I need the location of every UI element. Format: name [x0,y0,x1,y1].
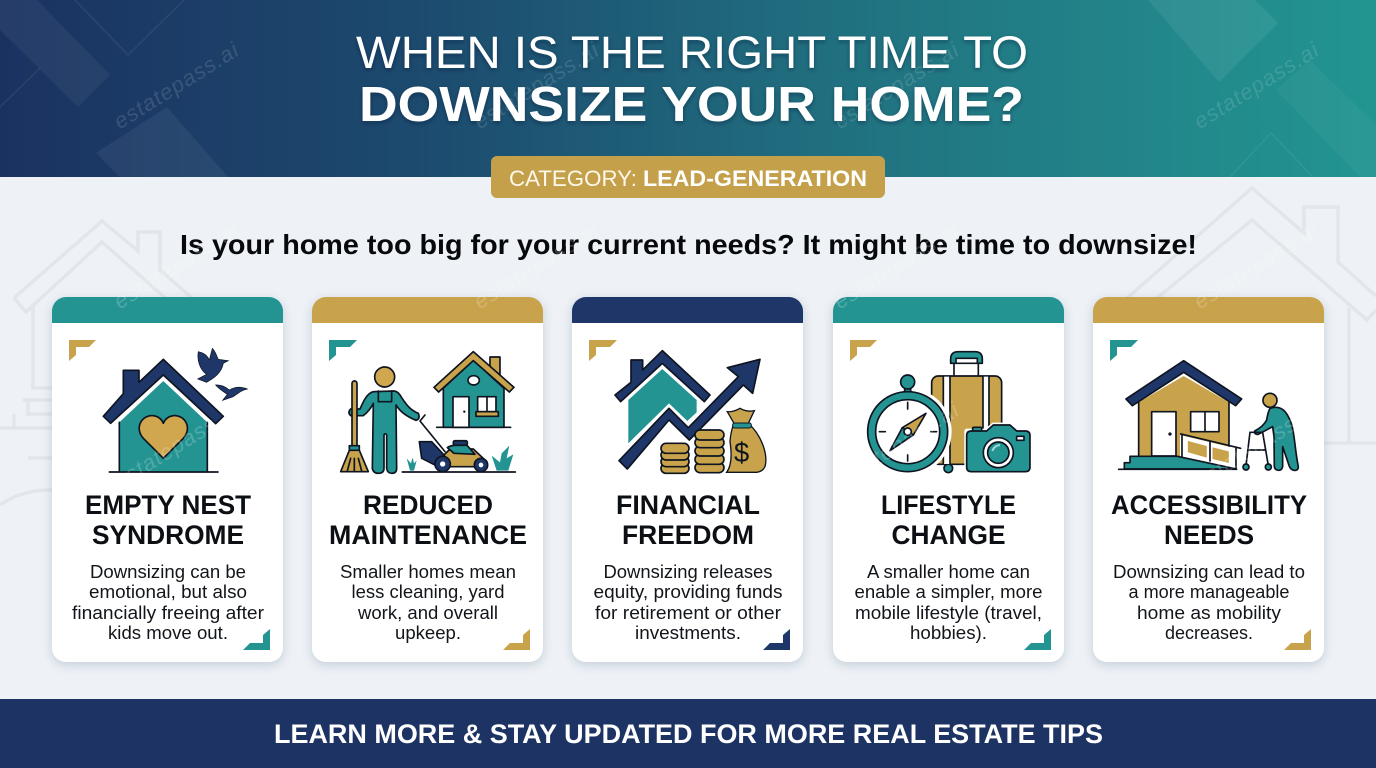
watermarks: estatepass.ai [829,397,964,494]
icon: house, rising arrow, coins and money bag [615,351,766,473]
watermarks: estatepass.ai [1189,397,1324,494]
watermarks: estatepass.ai [109,37,244,134]
description: mobile lifestyle (travel, [855,603,1042,623]
heading [881,490,1016,550]
title: WHEN IS THE RIGHT TIME TO [356,27,1028,78]
watermarks: estatepass.ai [469,37,604,134]
description: emotional, but also [89,582,247,602]
header banner [0,0,1376,177]
title: DOWNSIZE YOUR HOME? [359,78,1024,132]
heading: LIFESTYLE [881,490,1016,520]
heading: FREEDOM [622,520,754,550]
watermarks [109,37,1324,494]
watermarks: estatepass.ai [829,37,964,134]
description: a more manageable [1128,582,1290,602]
description: home as mobility [1137,603,1281,623]
description: equity, providing funds [594,582,782,602]
description [1113,562,1305,643]
watermarks: estatepass.ai [1189,217,1324,314]
description [854,562,1042,643]
description: enable a simpler, more [854,582,1042,602]
category badge: LEAD-GENERATION [643,166,867,191]
heading: REDUCED [363,490,493,520]
heading: EMPTY NEST [85,490,251,520]
icon: compass, suitcase and camera [864,352,1030,476]
heading: MAINTENANCE [329,520,527,550]
heading [85,490,251,550]
background house outlines [0,188,1376,505]
footer banner: LEARN MORE & STAY UPDATED FOR MORE REAL ESTATE TIPS [274,719,1103,749]
description: hobbies). [910,623,987,643]
category badge [491,156,885,198]
heading: SYNDROME [92,520,244,550]
heading: ACCESSIBILITY [1111,490,1307,520]
card: reduced maintenance [312,297,543,662]
watermarks: estatepass.ai [829,217,964,314]
title [356,27,1028,132]
category badge: CATEGORY: [509,166,637,191]
description [72,562,264,643]
description [340,562,516,643]
heading [329,490,527,550]
description: less cleaning, yard [352,582,504,602]
card: accessibility needs [1093,297,1324,662]
card: lifestyle change [833,297,1064,662]
description: Smaller homes mean [340,562,516,582]
icon: house with heart and birds [103,348,247,472]
description: Downsizing can be [90,562,246,582]
description: kids move out. [108,623,228,643]
description: decreases. [1165,623,1253,643]
description [594,562,782,643]
icon: person with broom, mower and house [341,352,515,473]
description: work, and overall [357,603,498,623]
description: Downsizing can lead to [1113,562,1305,582]
watermarks: estatepass.ai [109,217,244,314]
description: financially freeing after [72,603,264,623]
heading [616,490,760,550]
heading: FINANCIAL [616,490,760,520]
icon: house, rising arrow, coins and money bag: $ [734,437,749,468]
card: empty nest syndrome [52,297,283,662]
subtitle: Is your home too big for your current needs? It might be time to downsize! [180,229,1197,260]
description: Downsizing releases [604,562,772,582]
description: upkeep. [395,623,461,643]
description: investments. [635,623,741,643]
heading: NEEDS [1164,520,1254,550]
heading: CHANGE [892,520,1006,550]
footer banner [0,699,1376,768]
watermarks: estatepass.ai [1189,37,1324,134]
heading [1111,490,1307,550]
card: financial freedom [572,297,803,662]
description: A smaller home can [867,562,1030,582]
watermarks: estatepass.ai [469,217,604,314]
watermarks: estatepass.ai [109,397,244,494]
icon: house with ramp and person with walker [1119,361,1298,470]
description: for retirement or other [595,603,781,623]
